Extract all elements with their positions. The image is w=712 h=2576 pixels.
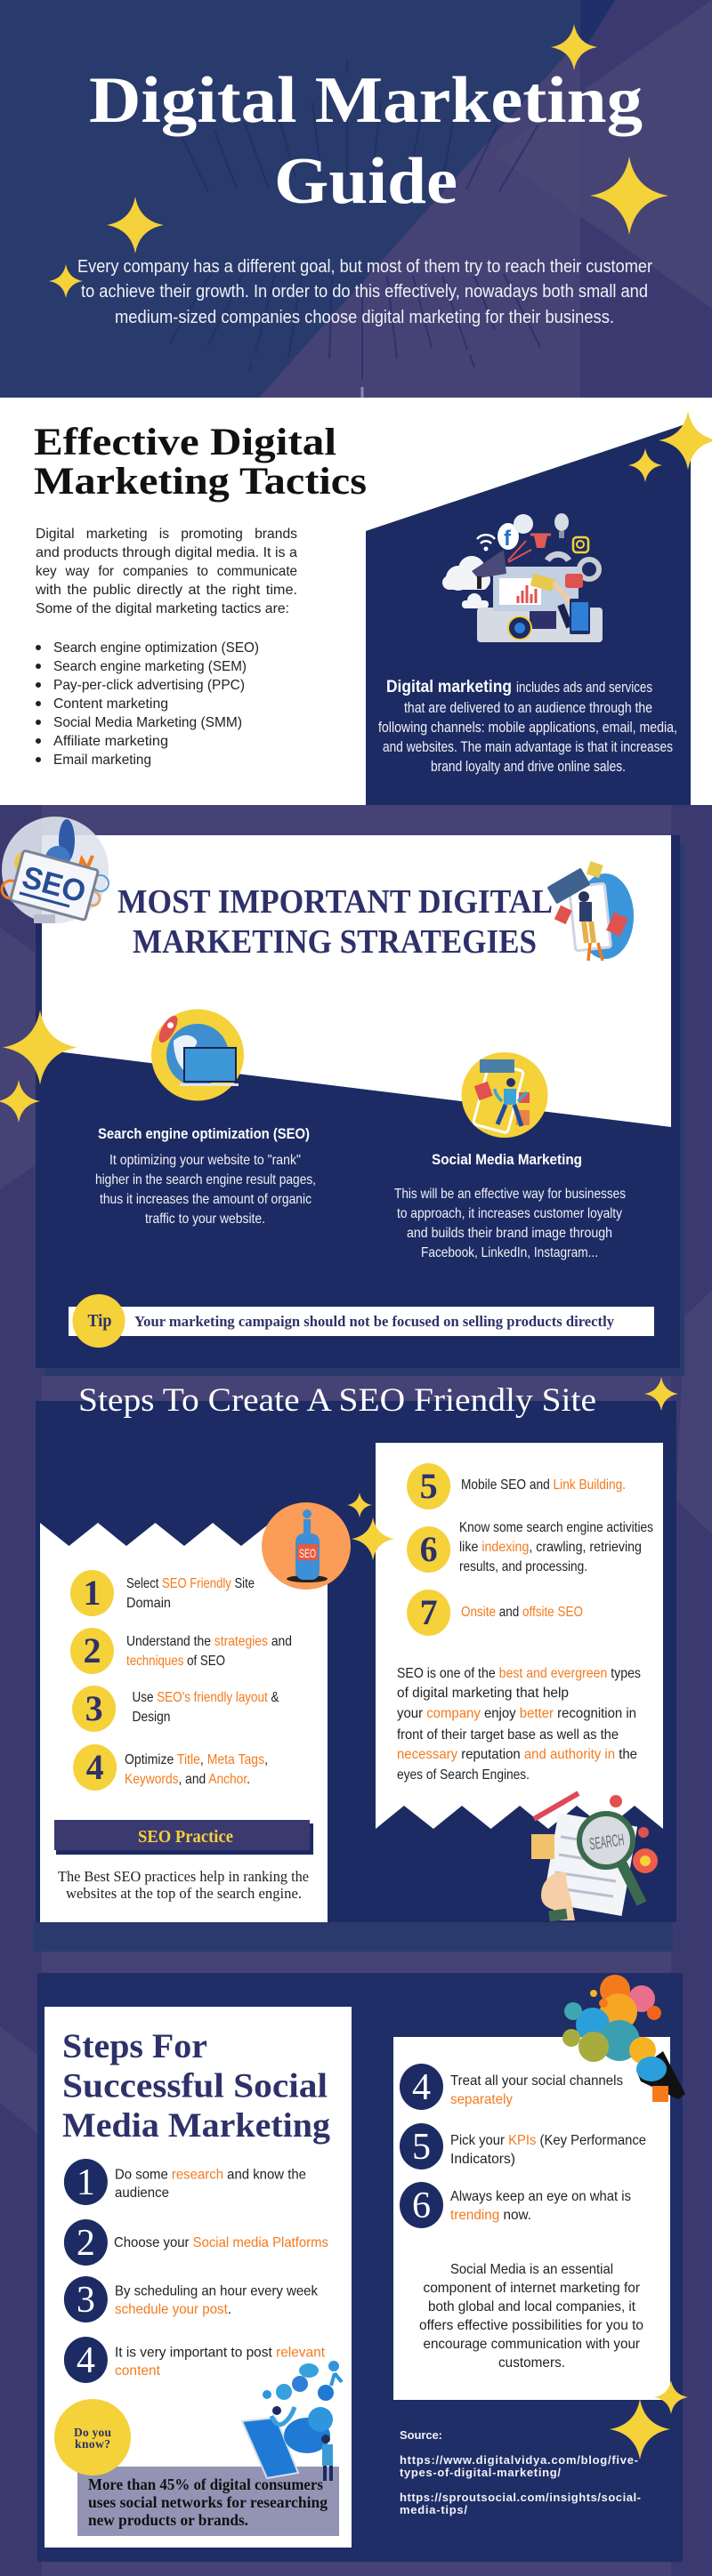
callout: do you know: uses social networks for researching [88, 2493, 328, 2511]
panel: steps for successful social media marketing [0, 1952, 688, 2576]
step 1 [70, 1570, 255, 1616]
social media paragraph: customers. [498, 2355, 565, 2371]
heading [117, 883, 553, 961]
paragraph [35, 527, 297, 616]
step 6: trending now. [450, 2208, 531, 2223]
heading: Effective Digital [34, 422, 336, 463]
step 5 [407, 1463, 626, 1509]
step 2 [70, 1628, 292, 1674]
SEO practice text: The Best SEO practices help in ranking the [58, 1868, 309, 1885]
step 4 [400, 2064, 623, 2110]
list of tactics: Pay-per-click advertising (PPC) [53, 678, 245, 693]
step 3: schedule your post. [115, 2302, 231, 2317]
text: social media strategy [394, 1151, 626, 1260]
title: Guide [274, 145, 457, 218]
callout text: digital marketing: includes ads and services [516, 680, 652, 696]
step 4: 4 [86, 1747, 104, 1787]
step 1 [64, 2159, 306, 2205]
panel: most important strategies [0, 805, 712, 1534]
illustration: search magnifier: SEARCH [588, 1831, 626, 1855]
step 4: separately [450, 2092, 513, 2107]
icon: SEO bottle [262, 1502, 351, 1590]
text: sources: media-tips/ [400, 2503, 467, 2516]
list of tactics: Content marketing [53, 696, 168, 712]
paragraph: Some of the digital marketing tactics are: [36, 601, 289, 616]
step 4: Treat all your social channels [450, 2073, 623, 2089]
list of tactics: Affiliate marketing [53, 734, 168, 749]
social media paragraph: offers effective possibilities for you to [419, 2318, 643, 2333]
icon: star [654, 2380, 688, 2414]
step 3: By scheduling an hour every week [115, 2284, 319, 2298]
icon: star [49, 264, 83, 298]
step 7: 7 [420, 1592, 438, 1632]
step 2: Understand the strategies and [126, 1634, 292, 1649]
SEO practice label [54, 1820, 313, 1855]
step 1: 1 [84, 1573, 101, 1613]
text: SEO strategy: thus it increases the amount of organic [100, 1192, 312, 1207]
callout: do you know [54, 2399, 339, 2536]
illustration: SEO monitor: SEO [19, 859, 89, 910]
step 3: Use SEO's friendly layout & [132, 1690, 279, 1705]
text: SEO strategy: higher in the search engine result pages, [95, 1172, 316, 1187]
social media paragraph [419, 2262, 643, 2371]
step 2 [64, 2219, 328, 2266]
paragraph: with the public directly at the right time. [35, 583, 297, 598]
step 3: 3 [77, 2280, 95, 2321]
step 1: Do some research and know the [115, 2167, 306, 2183]
SEO paragraph: necessary reputation and authority in the [397, 1747, 637, 1762]
text: SEO strategy: traffic to your website. [145, 1212, 265, 1227]
step 7: Onsite and offsite SEO [461, 1605, 583, 1620]
intro text: to achieve their growth. In order to do this effectively, nowadays both small and [81, 282, 648, 302]
title: Digital Marketing [89, 64, 643, 137]
text: social media strategy: This will be an effective way for businesses [394, 1187, 626, 1202]
step 6 [407, 1520, 653, 1574]
heading: MARKETING STRATEGIES [133, 923, 537, 961]
step 5: Indicators) [450, 2152, 515, 2167]
heading: Successful Social [62, 2067, 328, 2105]
step 5: Pick your KPIs (Key Performance [450, 2133, 646, 2148]
step 4: content [115, 2363, 161, 2379]
paragraph: Digital marketing is promoting brands [36, 527, 297, 542]
callout: tip: Tip [87, 1311, 112, 1331]
icon: star [551, 24, 597, 70]
list of tactics: Social Media Marketing (SMM) [53, 715, 242, 730]
intro text: Every company has a different goal, but most of them try to reach their customer [77, 257, 652, 277]
panel: effective digital marketing tactics [0, 398, 712, 805]
card: steps 1 to 4 [40, 1523, 328, 1922]
social media paragraph: Social Media is an essential [450, 2262, 613, 2277]
illustration: social bubbles and megaphone [562, 1975, 685, 2102]
callout text: digital marketing [378, 678, 677, 775]
text: sources: Source: [400, 2428, 442, 2442]
step 5 [400, 2123, 646, 2169]
callout: tip: Your marketing campaign should not be focused on selling products directly [134, 1313, 614, 1330]
icon: star [590, 157, 668, 235]
list of tactics: Search engine marketing (SEM) [53, 659, 247, 674]
icon: star [659, 411, 712, 470]
card: steps 5 to 7 [376, 1443, 663, 1829]
icon: star [352, 1517, 394, 1560]
step 4: 4 [77, 2340, 95, 2381]
social media paragraph: encourage communication with your [424, 2337, 641, 2352]
text: sources: https://www.digitalvidya.com/blog/five- [400, 2453, 638, 2467]
panel: steps to create a SEO friendly site [33, 1376, 678, 1952]
SEO practice label: SEO Practice [138, 1827, 233, 1847]
list of tactics: Search engine optimization (SEO) [53, 640, 259, 656]
text: social media strategy: and builds their brand image through [407, 1226, 612, 1241]
illustration: digital marketing monitor: f [504, 527, 512, 551]
step 1: Select SEO Friendly Site [126, 1576, 255, 1591]
illustration: person in phone [546, 861, 634, 961]
step 5: 5 [420, 1466, 438, 1506]
list of tactics: Email marketing [53, 753, 151, 768]
text: sources: https://sproutsocial.com/insights/social- [400, 2491, 641, 2504]
step 3 [72, 1686, 279, 1732]
step 3: 3 [85, 1688, 103, 1728]
heading [34, 422, 367, 503]
step 4 [64, 2337, 326, 2383]
intro text: medium-sized companies choose digital marketing for their business. [115, 308, 614, 327]
text: SEO strategy [95, 1125, 316, 1227]
social media paragraph: component of internet marketing for [424, 2281, 641, 2296]
heading: Marketing Tactics [34, 461, 367, 503]
text: social media strategy: Social Media Marketing [432, 1151, 582, 1168]
heading [62, 2027, 331, 2145]
callout: do you know: know? [75, 2437, 110, 2451]
step 4: Optimize Title, Meta Tags, [125, 1752, 268, 1767]
intro text [77, 257, 652, 327]
heading: MOST IMPORTANT DIGITAL [117, 883, 553, 921]
step 5: Mobile SEO and Link Building. [461, 1477, 626, 1493]
card: steps 1 to 4 [44, 2007, 352, 2548]
heading: Steps For [62, 2027, 207, 2065]
callout: do you know: More than 45% of digital consumers [88, 2475, 323, 2493]
step 1: audience [115, 2186, 169, 2201]
illustration: search magnifier [531, 1793, 658, 1921]
step 6: 6 [412, 2186, 431, 2226]
text: social media strategy: to approach, it increases customer loyalty [397, 1206, 622, 1221]
icon: star [347, 1493, 372, 1517]
text: social media strategy: Facebook, LinkedIn, Instagram... [421, 1245, 598, 1260]
step 6: like indexing, crawling, retrieving [459, 1540, 642, 1555]
SEO practice text [58, 1868, 309, 1902]
step 4 [73, 1744, 268, 1791]
SEO paragraph: front of their target base as well as the [397, 1727, 619, 1743]
step 1: 1 [77, 2162, 95, 2203]
step 3: Design [132, 1710, 171, 1725]
illustration: digital marketing monitor [442, 513, 603, 642]
icon: star [628, 448, 662, 482]
paragraph: and products through digital media. It is a [36, 545, 297, 560]
step 6: Always keep an eye on what is [450, 2189, 631, 2204]
step 4: It is very important to post relevant [115, 2345, 326, 2361]
callout: do you know: new products or brands. [88, 2511, 248, 2529]
step 7 [407, 1590, 583, 1636]
step 6: results, and processing. [459, 1559, 587, 1574]
icon: star [3, 1010, 77, 1085]
step 4: 4 [412, 2067, 431, 2108]
text: SEO strategy: It optimizing your website to "rank" [109, 1153, 301, 1168]
step 2: 2 [84, 1630, 101, 1670]
SEO paragraph: of digital marketing that help [397, 1686, 569, 1701]
step 6 [400, 2182, 631, 2228]
icon: SEO globe and laptop [151, 1009, 244, 1101]
icon: star [610, 2399, 670, 2459]
heading: Steps To Create A SEO Friendly Site [78, 1382, 596, 1419]
step 3 [64, 2276, 319, 2322]
social media paragraph: both global and local companies, it [428, 2299, 636, 2314]
navy angled panel [366, 423, 691, 805]
text: sources: types-of-digital-marketing/ [400, 2466, 561, 2479]
callout text: digital marketing: Digital marketing [386, 678, 512, 696]
panel: hero [0, 0, 712, 402]
step 6: Know some search engine activities [459, 1520, 653, 1535]
SEO paragraph [397, 1666, 641, 1783]
step 5: 5 [412, 2127, 431, 2168]
icon: star [0, 1080, 40, 1123]
list of tactics [36, 640, 259, 768]
step 2: 2 [77, 2223, 95, 2264]
SEO practice text: websites at the top of the search engine. [66, 1885, 302, 1902]
title [89, 64, 643, 218]
step 1: Domain [126, 1596, 171, 1611]
step 2: Choose your Social media Platforms [114, 2235, 328, 2250]
step 4: Keywords, and Anchor. [125, 1772, 250, 1787]
callout text: digital marketing: that are delivered to an audience through the [404, 700, 652, 716]
illustration: social media people [242, 2361, 342, 2481]
SEO paragraph: SEO is one of the best and evergreen types [397, 1666, 641, 1681]
text: SEO strategy: Search engine optimization (SEO) [98, 1125, 310, 1142]
text: sources [400, 2428, 641, 2516]
icon: star [107, 197, 164, 254]
step 2: techniques of SEO [126, 1654, 225, 1669]
callout: tip [69, 1294, 654, 1348]
icon: social media person [461, 1052, 548, 1138]
paragraph: key way for companies to communicate [36, 564, 297, 579]
icon: star [644, 1377, 678, 1411]
card: steps 4 to 6 [393, 2037, 670, 2400]
step 6: 6 [420, 1529, 438, 1569]
callout: do you know: Do you [74, 2426, 111, 2439]
SEO paragraph: eyes of Search Engines. [397, 1767, 530, 1783]
SEO paragraph: your company enjoy better recognition in [397, 1706, 636, 1721]
illustration: SEO monitor [2, 817, 109, 923]
heading: Media Marketing [62, 2106, 331, 2145]
icon: SEO bottle: SEO [299, 1546, 316, 1560]
callout text: digital marketing: brand loyalty and drive online sales. [431, 759, 626, 775]
